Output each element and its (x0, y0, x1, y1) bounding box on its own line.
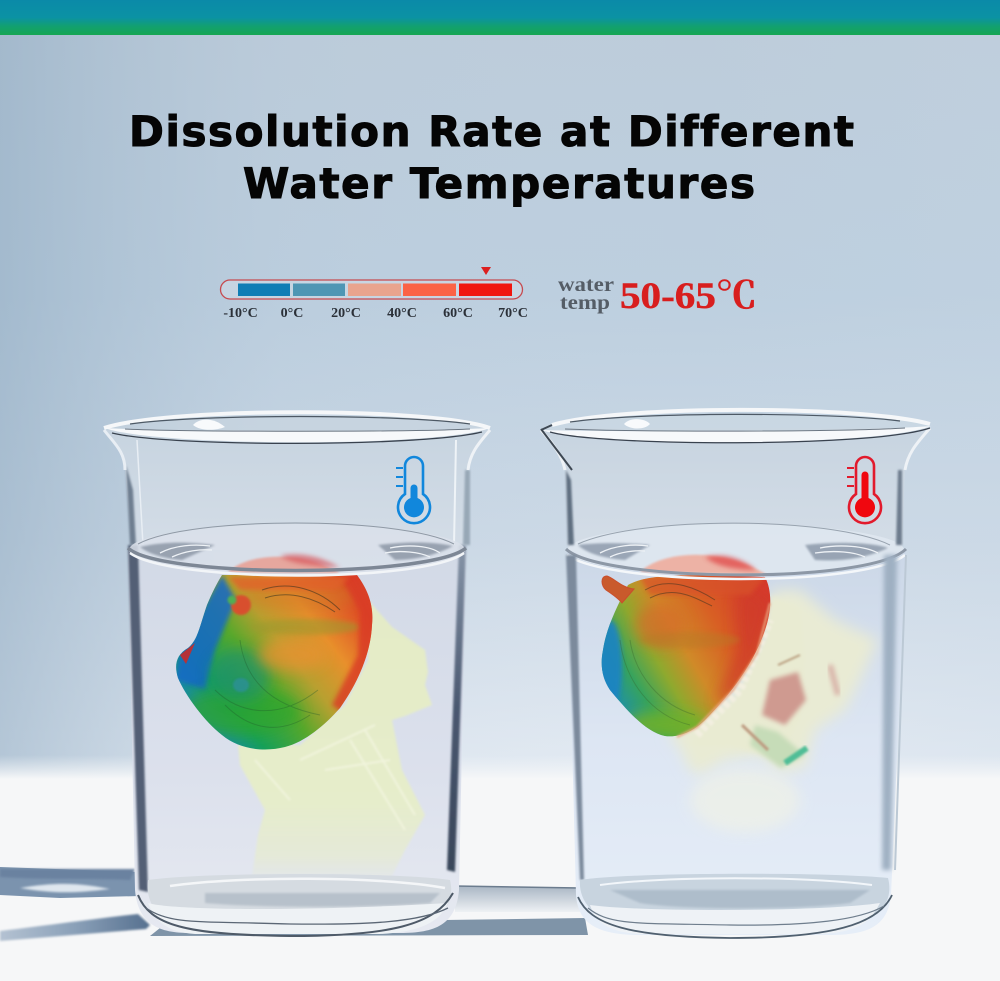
cold beaker base (138, 874, 453, 936)
hot water surface (566, 523, 906, 579)
hot dome nub (602, 576, 634, 603)
cold rainbow printed dome (176, 575, 376, 749)
hot beaker rim and spout (541, 410, 931, 470)
water temp reading: temp (560, 292, 610, 314)
scale labels: 70°C (498, 306, 528, 321)
top colour bar (0, 0, 1000, 35)
scale marker (481, 267, 491, 275)
temperature scale (220, 267, 528, 321)
icon: hot thermometer (847, 457, 881, 523)
table shadows and reflections (0, 867, 588, 941)
scale labels: 60°C (443, 306, 473, 321)
hot support filament residue (668, 590, 878, 832)
cold water body (128, 548, 466, 933)
beaker: hot water (541, 410, 931, 938)
water temp reading (558, 274, 757, 317)
title: Water Temperatures (243, 159, 755, 208)
scale labels: 0°C (281, 306, 303, 321)
scale labels: 40°C (387, 306, 417, 321)
title (129, 107, 854, 208)
scale labels: 20°C (331, 306, 361, 321)
scale labels (223, 306, 528, 321)
water temp reading: water (558, 274, 614, 296)
cold support filament residue (238, 600, 432, 890)
hot water body (567, 548, 906, 935)
water temp reading: 50-65℃ (620, 276, 757, 317)
title: Dissolution Rate at Different (129, 107, 854, 156)
cold beaker glass air section (104, 430, 490, 550)
cold beaker side walls (126, 440, 470, 892)
scale labels: -10°C (223, 306, 258, 321)
beaker: cold water (104, 412, 490, 936)
hot beaker glass air section (541, 428, 930, 550)
hot beaker side walls (566, 470, 906, 880)
scale colour segments (238, 284, 512, 296)
hot rainbow printed dome (598, 575, 772, 739)
hot beaker base (578, 874, 892, 938)
cold beaker rim (104, 412, 490, 470)
icon: cold thermometer (396, 457, 430, 523)
cold water surface (128, 523, 466, 576)
